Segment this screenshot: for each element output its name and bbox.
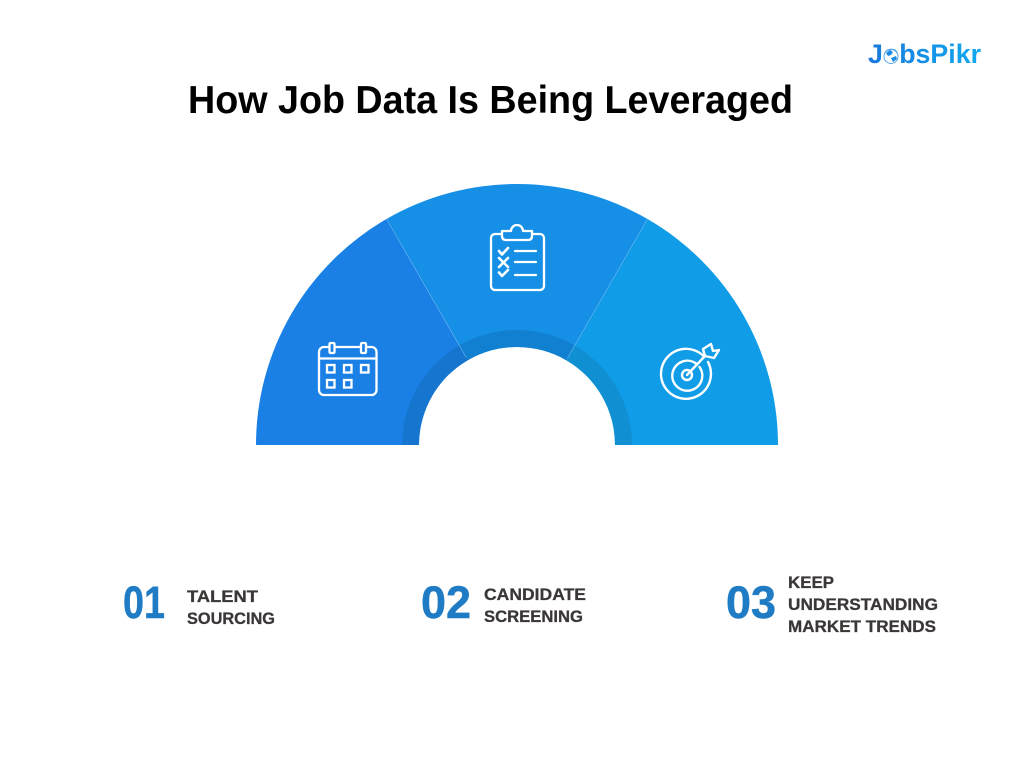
number 03: 03 [726,577,776,628]
item 01 [123,577,275,628]
title: How Job Data Is Being Leveraged [188,79,793,122]
item 03 [726,573,938,636]
label: keep understanding market trends: UNDERSTANDING [788,595,938,614]
icon: clipboard checklist [491,225,544,290]
label: talent sourcing: SOURCING [187,609,275,628]
label: candidate screening: SCREENING [484,607,583,626]
label: keep understanding market trends [788,573,938,636]
label: keep understanding market trends: KEEP [788,573,834,592]
item 02 [421,577,586,628]
inner band: right [566,345,632,445]
inner band: middle [460,330,574,360]
icon: globe in logo [884,50,898,64]
inner band: left [402,345,468,445]
semicircle chart [256,184,778,445]
number 01: 01 [123,577,165,628]
label: talent sourcing: TALENT [187,587,259,606]
label: candidate screening [484,585,586,626]
logo: JobsPikr: JobsPikr [868,39,981,69]
label: keep understanding market trends: MARKET TRENDS [788,617,936,636]
label: talent sourcing [187,587,275,628]
segment: right [566,219,778,445]
label: candidate screening: CANDIDATE [484,585,586,604]
number 02: 02 [421,577,471,628]
icon: target with arrow [661,344,719,399]
icon: calendar [319,343,376,395]
segment: middle [386,184,648,360]
segment: left [256,219,468,445]
